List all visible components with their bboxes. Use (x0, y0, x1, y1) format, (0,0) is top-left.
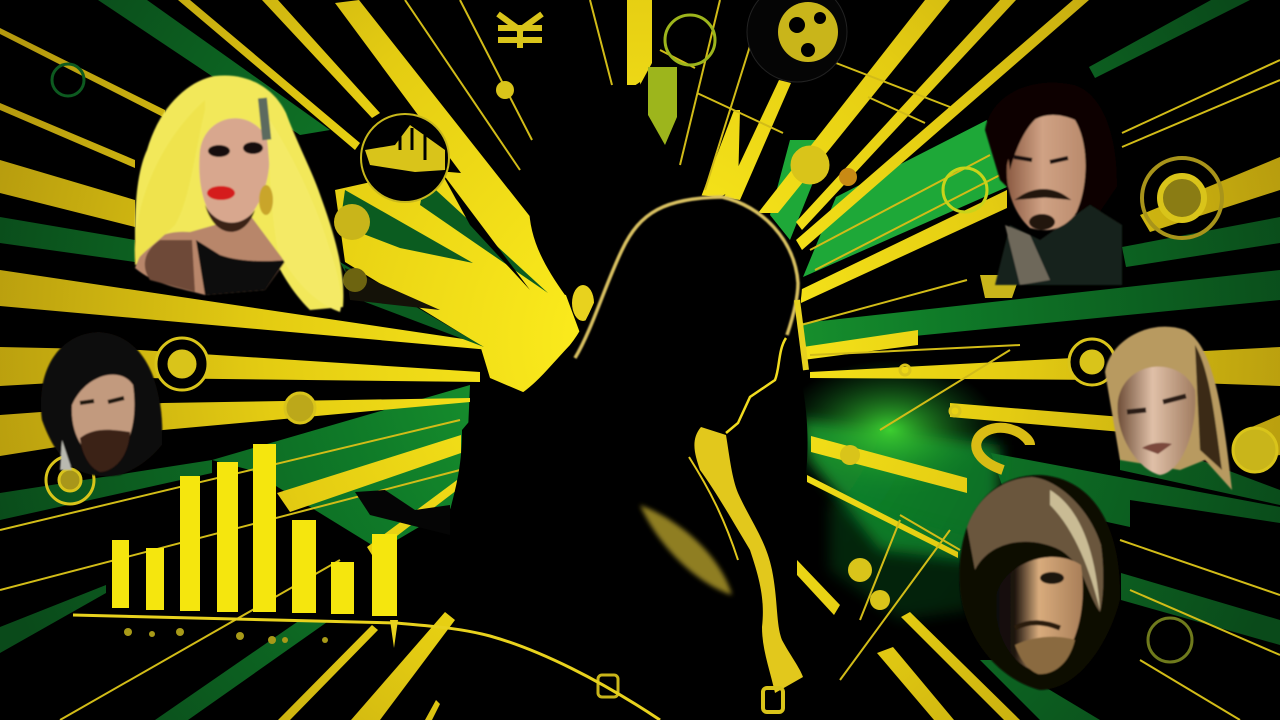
hood (959, 475, 1120, 690)
moustache (1015, 623, 1060, 628)
bright centre (335, 0, 580, 395)
green spikes over burst (340, 180, 548, 347)
collar (1005, 225, 1050, 285)
portrait: blonde woman (135, 75, 343, 312)
eye (1040, 572, 1064, 584)
face (1118, 367, 1195, 475)
hair highlight (1050, 490, 1100, 610)
silhouette: rear figure (529, 82, 695, 295)
silhouette: main figure (355, 195, 808, 720)
hair clip (258, 98, 271, 140)
face (199, 118, 270, 227)
lips (1142, 443, 1172, 454)
black dress (196, 240, 286, 295)
beard (80, 430, 130, 472)
axis tick (390, 620, 398, 648)
lit hair strands (640, 505, 732, 595)
hair (967, 477, 1103, 612)
beard (1015, 637, 1075, 674)
hair front right (262, 108, 341, 312)
shoulder rim (797, 300, 806, 370)
bar chart (73, 444, 660, 720)
shirt (995, 205, 1122, 285)
face (995, 557, 1083, 672)
eyes (1127, 396, 1186, 412)
green glow (780, 360, 1000, 500)
bright green burst (770, 120, 1007, 277)
lit shoulder and arm (694, 427, 803, 693)
hair back (135, 75, 343, 310)
white fleck (60, 440, 72, 470)
hand silhouette (355, 490, 450, 535)
profile line (726, 338, 786, 433)
bottom clasp right (763, 688, 783, 712)
chart tick marks (124, 628, 328, 644)
jaw shadow (205, 205, 255, 232)
hair strands (1008, 112, 1045, 170)
orb on rear figure (572, 285, 594, 321)
portrait: shaggy man lower right (959, 475, 1120, 690)
earring (259, 185, 273, 215)
coin: skull top (747, 0, 847, 82)
goatee (1029, 214, 1055, 230)
hair rim light (575, 197, 798, 358)
hair (41, 332, 162, 476)
shoulders (135, 215, 285, 295)
hair shadow (1195, 345, 1222, 470)
hatch block below burst (345, 268, 440, 310)
coin: hatched disc (361, 114, 449, 202)
moustache (1020, 190, 1066, 198)
lips (207, 186, 235, 200)
top centre yellow-green shard (648, 67, 677, 145)
eyes (80, 398, 124, 403)
hair front left (135, 100, 205, 262)
black sliver in burst (440, 170, 530, 290)
eyes (1014, 157, 1068, 162)
shoulder shadow (145, 240, 195, 292)
hair (985, 82, 1117, 215)
portrait: blonde figure right (1105, 327, 1232, 490)
hair (1105, 327, 1232, 490)
eyes (208, 145, 230, 157)
portrait: dark-haired man left (41, 332, 162, 476)
chart axis curve (73, 615, 660, 720)
face (72, 375, 134, 462)
bottom clasp left (598, 675, 618, 697)
face (1007, 115, 1086, 230)
portrait: dark-haired man top right (985, 82, 1122, 285)
